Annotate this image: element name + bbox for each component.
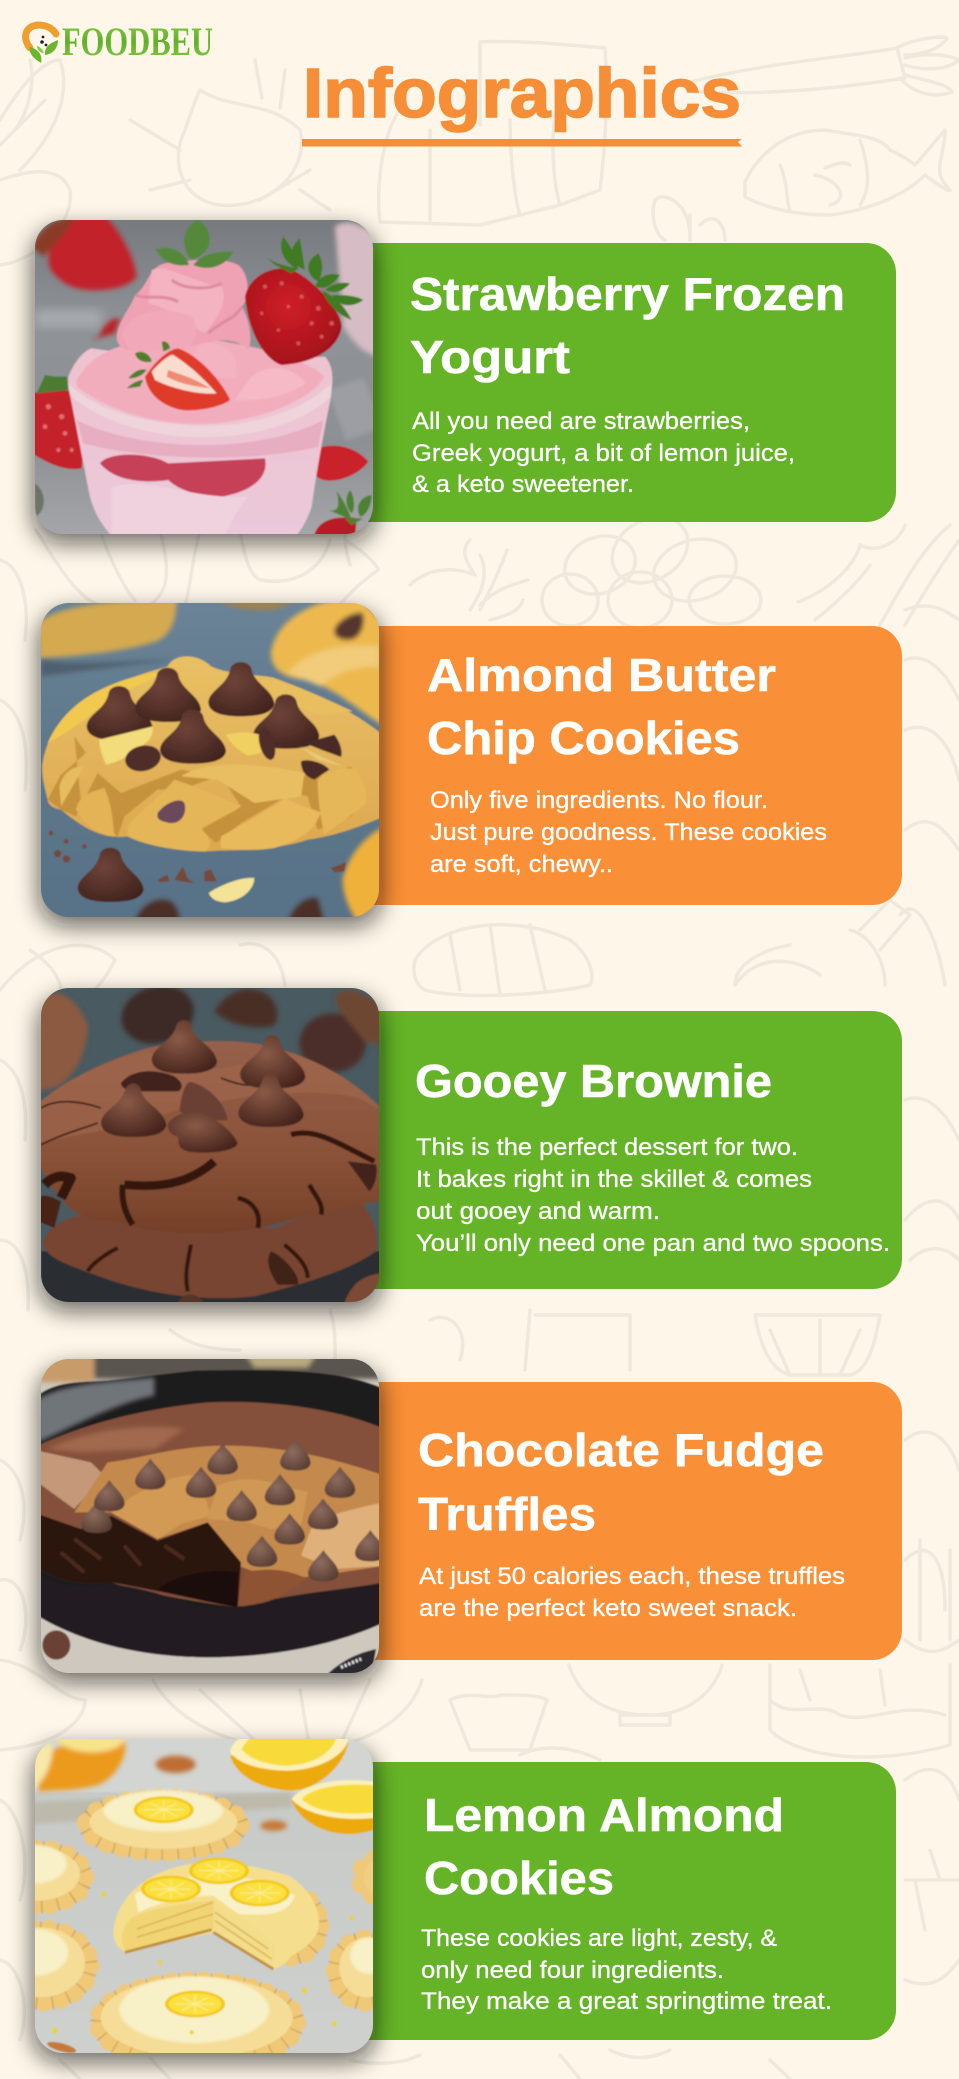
description [419, 1563, 845, 1622]
right cookies [360, 1859, 393, 1896]
description [412, 408, 795, 498]
left cookies [0, 1849, 85, 1906]
heading: Chip Cookies [427, 712, 740, 764]
heading: Yogurt [410, 331, 570, 383]
image shadow [33, 1748, 375, 2062]
image: gooey brownie cookies [41, 988, 379, 1302]
panel: strawberry frozen yogurt [340, 243, 896, 522]
heading: Truffles [418, 1488, 596, 1540]
description: only need four ingredients. [421, 1957, 724, 1984]
big strawberry [245, 268, 342, 365]
table items [42, 1630, 70, 1660]
cup [68, 348, 332, 540]
title underline [302, 139, 742, 146]
description: Only five ingredients. No flour. [430, 787, 768, 814]
inner strawberries [100, 455, 266, 497]
logo: FOODBEU [26, 19, 213, 64]
logo icon: ring with leaves [26, 25, 58, 63]
cracked chunks [48, 736, 366, 843]
description: All you need are strawberries, [412, 408, 750, 435]
description: are soft, chewy.. [430, 851, 613, 878]
image: skillet brownie [41, 1359, 379, 1673]
image: strawberry frozen yogurt cup [35, 220, 373, 534]
description: Just pure goodness. These cookies [430, 819, 827, 846]
description [421, 1925, 832, 2015]
panel: lemon almond cookies [340, 1762, 896, 2040]
description [416, 1134, 890, 1257]
image shadow [39, 997, 381, 1311]
row 4: chocolate fudge truffles [31, 1349, 902, 1683]
image shadow [39, 612, 381, 926]
panel: gooey brownie [350, 1011, 902, 1289]
top cookie with scalloped edge [86, 1798, 241, 1852]
description: Greek yogurt, a bit of lemon juice, [412, 440, 795, 467]
description [430, 787, 827, 878]
pan [38, 1370, 384, 1657]
image: lemon cookies [35, 1739, 373, 2053]
main cookie [42, 656, 384, 851]
description: out gooey and warm. [416, 1198, 660, 1225]
mint [156, 220, 233, 268]
row 2: almond butter chip cookies [31, 593, 902, 927]
lower cookie [41, 1250, 379, 1302]
row 5: lemon almond cookies [0, 1729, 896, 2064]
heading: Chocolate Fudge [418, 1424, 824, 1476]
bottom cookie [98, 1981, 297, 2064]
foreground [343, 826, 384, 923]
description: & a keto sweetener. [412, 471, 634, 498]
strawberry slice [145, 348, 230, 410]
description: These cookies are light, zesty, & [421, 1925, 777, 1952]
description: At just 50 calories each, these truffles [419, 1563, 845, 1590]
row 3: gooey brownie [31, 978, 902, 1312]
image shadow [39, 1368, 381, 1682]
heading: Cookies [424, 1852, 614, 1904]
panel: almond butter chip cookies [350, 626, 902, 905]
center cut cookie [263, 1894, 320, 1957]
heading [427, 649, 776, 764]
description: This is the perfect dessert for two. [416, 1134, 798, 1161]
heading: Strawberry Frozen [410, 268, 845, 320]
white chips [99, 726, 153, 765]
brownie top [38, 1402, 384, 1607]
title: Infographics [303, 54, 741, 132]
description: are the perfect keto sweet snack. [419, 1595, 797, 1622]
upper cookie [38, 1041, 384, 1233]
heading: Lemon Almond [424, 1789, 784, 1841]
heading: Almond Butter [427, 649, 776, 701]
chocolate kisses [152, 1020, 217, 1074]
heading [410, 268, 845, 383]
swirl [117, 260, 250, 351]
chocolate kisses [87, 686, 153, 740]
image: almond butter chip cookie [41, 603, 379, 917]
heading: Gooey Brownie [415, 1055, 772, 1107]
pan rim front [41, 1583, 379, 1658]
description: They make a great springtime treat. [421, 1988, 832, 2015]
image shadow [33, 229, 375, 543]
chips [81, 1502, 112, 1533]
logo wordmark: FOODBEU [62, 19, 213, 64]
panel: chocolate fudge truffles [350, 1382, 902, 1660]
row 1: strawberry frozen yogurt [25, 210, 896, 544]
bottom right strawberry [314, 516, 357, 534]
heading [418, 1424, 824, 1540]
heading [424, 1789, 784, 1904]
description: It bakes right in the skillet & comes [416, 1166, 812, 1193]
description: You’ll only need one pan and two spoons. [416, 1230, 890, 1257]
